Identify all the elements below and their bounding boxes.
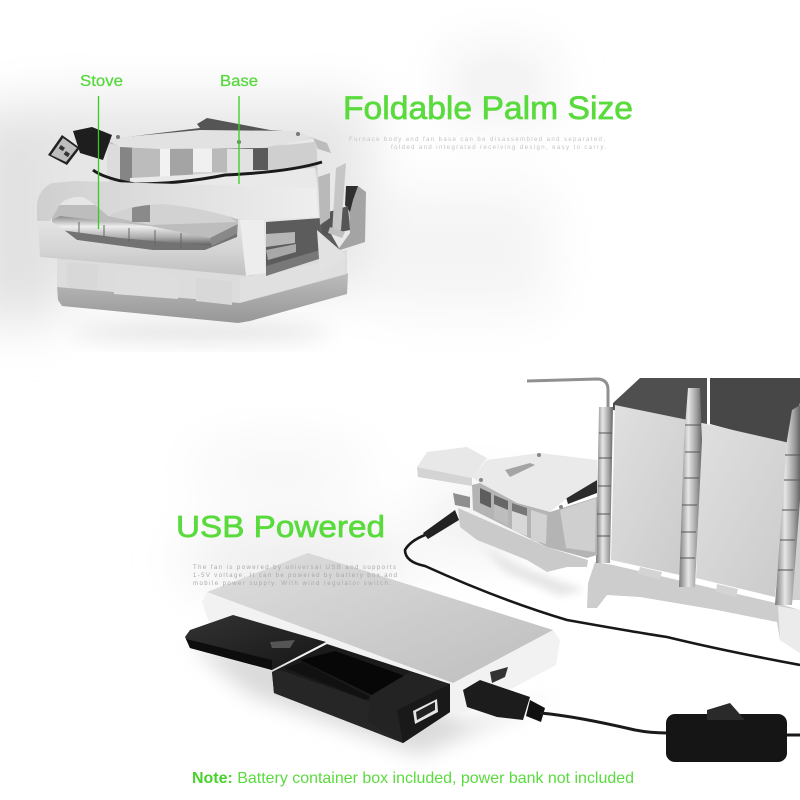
heading: USB Powered: USB Powered <box>176 509 385 544</box>
power bank <box>190 553 560 755</box>
soft studio backdrop: top <box>0 50 550 320</box>
description: USB: The fan is powered by universal USB and supports <box>193 565 396 571</box>
light panel 2 <box>696 423 790 597</box>
stove / base callouts <box>80 73 258 229</box>
USB port <box>413 699 438 724</box>
inline switch <box>666 703 800 762</box>
shadow <box>480 545 585 596</box>
USB plug and cord <box>463 680 667 733</box>
right side interior <box>266 218 340 275</box>
label: Base: Base <box>220 73 258 90</box>
battery wells <box>300 651 405 695</box>
power cable <box>405 535 800 665</box>
end cap <box>368 672 450 743</box>
bent rod <box>527 379 608 408</box>
base frame lower front <box>38 220 266 276</box>
note: Note: Battery container box included, power bank not included <box>192 770 634 787</box>
photo: folded stove <box>37 73 366 342</box>
description: folding <box>349 137 606 151</box>
USB plug <box>48 127 112 165</box>
light panel 1 <box>611 405 688 575</box>
dark back panels <box>613 378 707 424</box>
black cable <box>93 162 322 184</box>
hinge rows <box>52 216 212 246</box>
fan body <box>107 142 318 192</box>
soft studio backdrop: bottom <box>180 440 540 590</box>
lower rim <box>458 508 588 572</box>
fan unit <box>417 447 597 572</box>
description: USB <box>193 565 397 587</box>
battery box <box>185 615 450 743</box>
description: folding: folded and integrated receiving design, easy to carry. <box>391 145 606 151</box>
description: folding: Furnace body and fan base can be disassembled and separated, <box>349 137 605 143</box>
description: USB: mobile power supply. With wind regulator switch. <box>193 581 391 587</box>
lid <box>185 615 326 670</box>
hinge post <box>318 173 330 225</box>
tray bottom <box>57 273 348 323</box>
barrel jack <box>423 510 459 539</box>
heading: Foldable Palm Size: Foldable Palm Size <box>343 90 633 126</box>
top plate <box>103 118 313 149</box>
base shelf <box>587 562 800 653</box>
body <box>272 644 450 743</box>
description: USB: 1-5V voltage. It can be powered by battery box and <box>193 573 397 579</box>
cover plate <box>472 453 597 512</box>
leader line: Base <box>238 96 240 184</box>
hinge rods <box>596 407 613 563</box>
label: Stove: Stove <box>80 73 123 90</box>
right wall <box>337 186 366 251</box>
leader line: Stove <box>98 96 100 229</box>
reflection and shadow <box>70 322 330 342</box>
fan interior <box>472 483 597 558</box>
lower body <box>57 250 347 303</box>
frame interior <box>52 205 240 250</box>
photo: unfolded stove <box>405 378 800 665</box>
base frame upper band <box>37 181 318 221</box>
hinge knuckles <box>597 425 800 570</box>
